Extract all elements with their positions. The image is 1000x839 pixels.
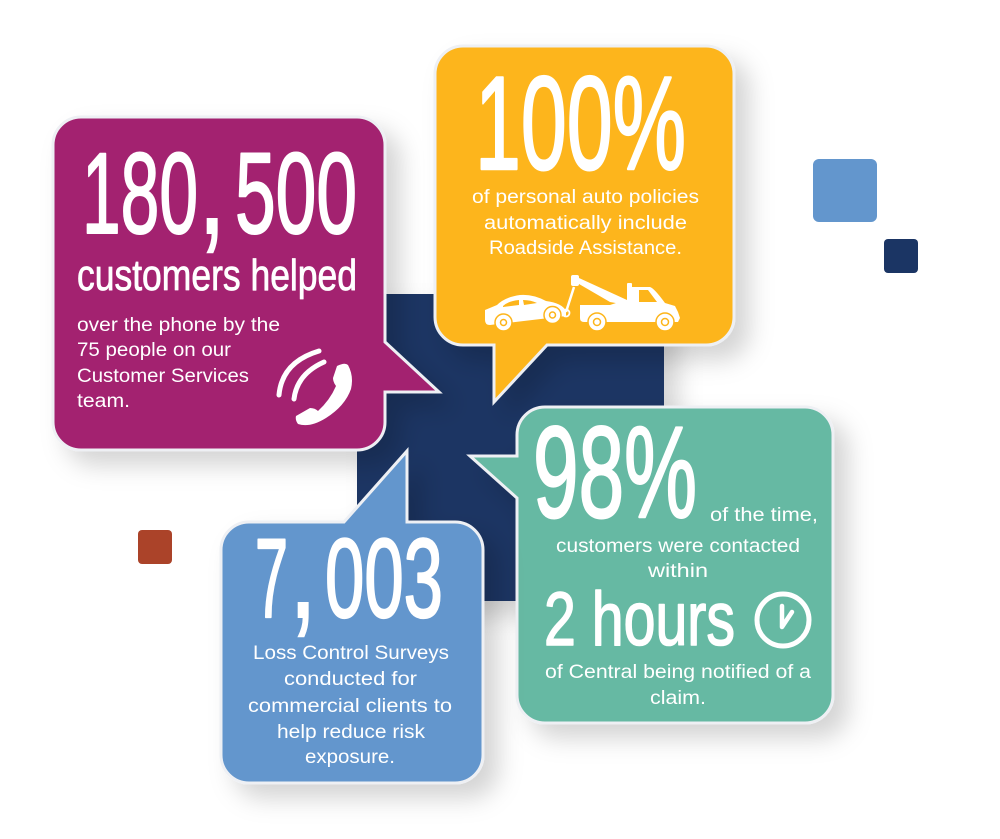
description text: over the phone by the [77,315,280,336]
yellow speech bubble [435,46,734,402]
navy centre square [357,294,664,601]
description text [248,643,452,768]
headline: 180,500 [82,98,357,266]
headline: 180,500: 500 [235,130,357,258]
description text: customers were contacted [556,536,800,557]
description text: of personal auto policies [472,187,699,208]
description text: team. [77,391,130,412]
blue speech bubble [221,451,483,783]
description text [556,505,818,582]
headline: 7,003: , [287,482,319,650]
icon: telephone [279,351,352,425]
headline: 2 hours: 2 hours [544,577,735,662]
headline: 98%: 98% [533,399,697,545]
description text: of the time, [710,505,818,526]
description text: commercial clients to [248,696,452,717]
panel: contact time [470,399,833,723]
description text [77,315,280,412]
description text [472,187,699,259]
rust decorative square [138,530,172,564]
closing text: claim. [650,688,706,709]
small navy decorative square [884,239,918,273]
green speech bubble [470,407,833,723]
headline: 180,500: , [196,98,228,266]
headline: 100%: 100% [475,50,686,198]
description text: conducted for [284,669,418,690]
description text: Customer Services [77,366,249,387]
description text: help reduce risk [277,722,426,743]
headline: 7,003: 7 [255,516,288,641]
closing text [545,662,811,709]
headline: 180,500: 180 [82,130,198,258]
description text: exposure. [305,747,395,768]
panel: roadside assistance [435,46,734,402]
icon: clock [757,594,809,646]
description text: Loss Control Surveys [253,643,449,664]
purple speech bubble [53,117,439,450]
closing text: of Central being notified of a [545,662,811,683]
headline: 7,003: 003 [325,516,443,641]
panel: loss control surveys [221,451,483,783]
description text: 75 people on our [77,340,232,361]
description text: automatically include [484,213,687,234]
light blue decorative square [813,159,877,222]
panel: customers helped [53,98,439,450]
icon: tow truck and car [485,275,680,331]
subheading: customers helped: customers helped [77,251,357,300]
headline: 7,003 [255,482,443,650]
description text: within [647,561,708,582]
description text: Roadside Assistance. [489,238,682,259]
